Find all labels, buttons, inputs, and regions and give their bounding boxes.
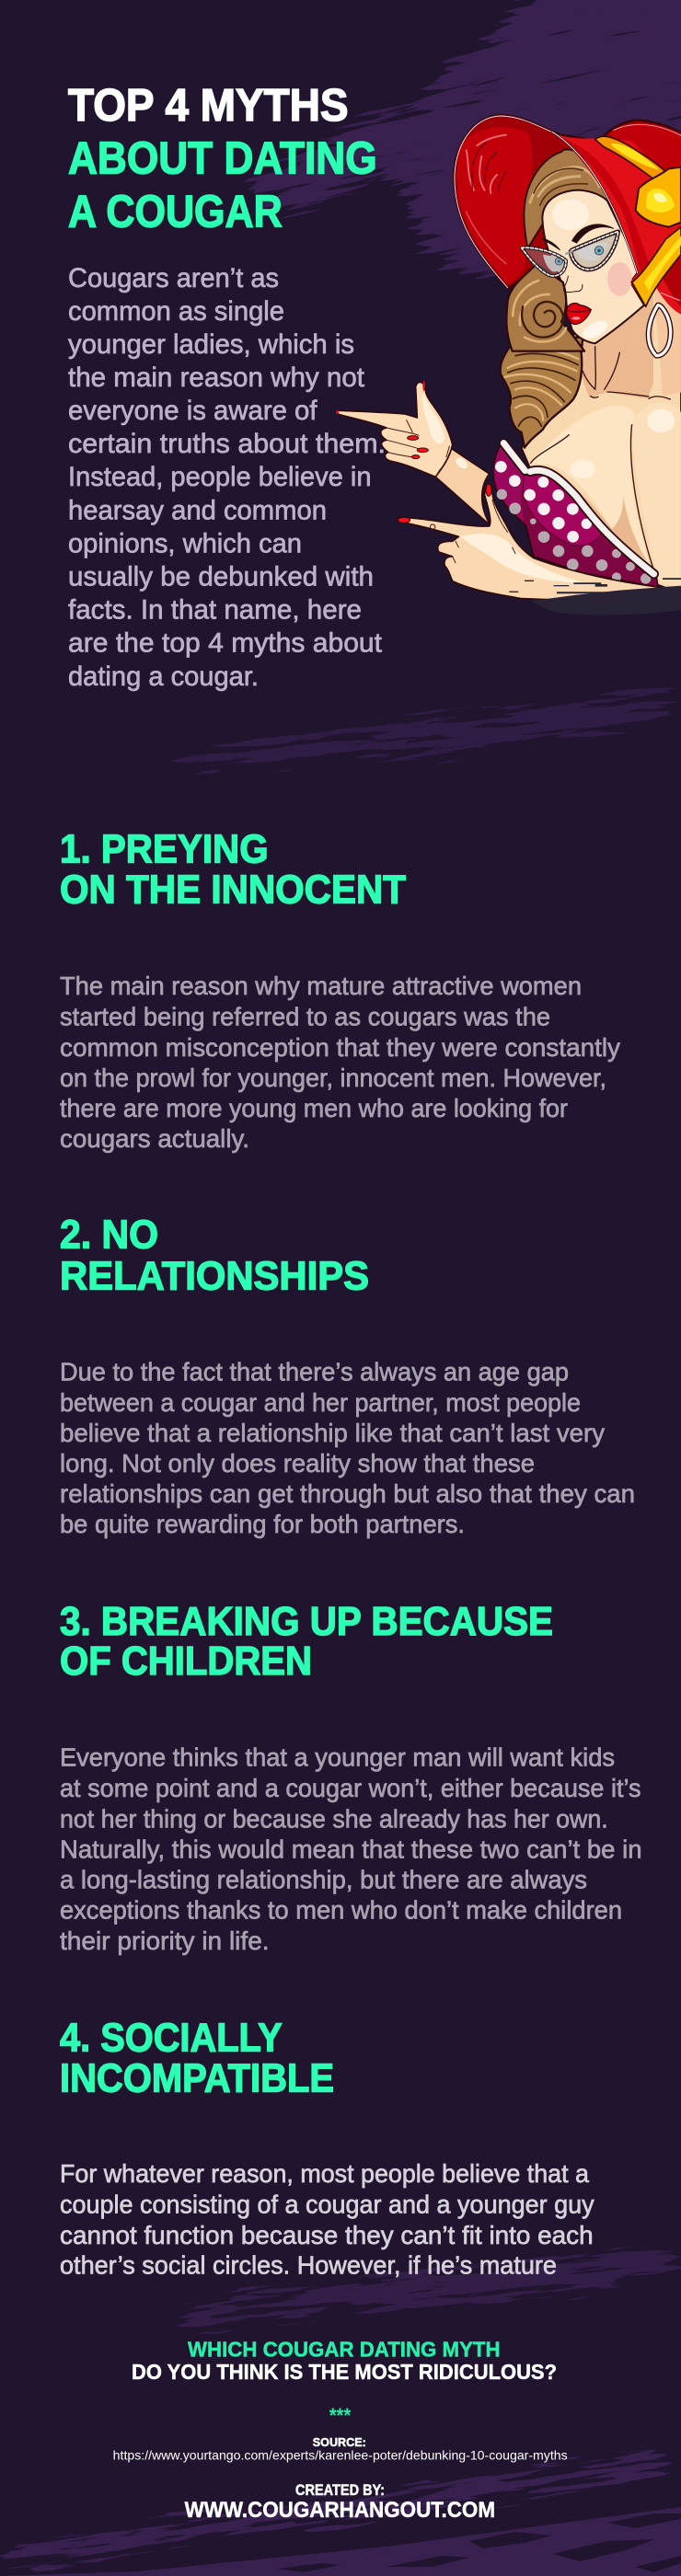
heading: myth 1 (60, 826, 406, 913)
credit: WWW.COUGARHANGOUT.COM (185, 2498, 495, 2523)
credit: CREATED BY: (295, 2482, 385, 2499)
closing question (132, 2338, 557, 2384)
text: myth 2 (60, 1358, 635, 1538)
text: myth 2: between a cougar and her partner, most people (60, 1388, 581, 1417)
text: myth 4: For whatever reason, most people believe that a (60, 2159, 589, 2188)
heading: myth 3: 3. BREAKING UP BECAUSE (60, 1599, 553, 1644)
closing question: DO YOU THINK IS THE MOST RIDICULOUS? (132, 2360, 557, 2384)
intro paragraph: the main reason why not (68, 362, 365, 393)
source: SOURCE: (313, 2436, 366, 2449)
text: myth 2: Due to the fact that there’s always an age gap (60, 1358, 569, 1386)
text: myth 3: a long-lasting relationship, but there are always (60, 1866, 587, 1894)
nose and lips (564, 276, 591, 324)
text: myth 3: Naturally, this would mean that these two can’t be in (60, 1835, 642, 1864)
intro paragraph: everyone is aware of (68, 396, 317, 426)
text: myth 2: believe that a relationship like that can’t last very (60, 1419, 605, 1447)
heading: myth 4: INCOMPATIBLE (60, 2055, 334, 2101)
illustration: pin-up woman pointing (336, 115, 681, 615)
text: myth 1: there are more young men who are looking for (60, 1094, 568, 1122)
text: myth 3 (60, 1743, 642, 1955)
hair: lower waves (501, 338, 583, 448)
title (68, 81, 377, 236)
text: myth 3: Everyone thinks that a younger man will want kids (60, 1743, 615, 1772)
heading: myth 1: ON THE INNOCENT (60, 868, 406, 913)
text: myth 1: on the prowl for younger, innocent men. However, (60, 1064, 606, 1092)
intro paragraph: certain truths about them. (68, 429, 386, 459)
source (113, 2436, 568, 2463)
text: myth 3: exceptions thanks to men who don’t make children (60, 1896, 622, 1925)
upper arm and pointing hand (336, 381, 491, 526)
hair curl (506, 264, 584, 351)
title: ABOUT DATING (68, 134, 377, 184)
intro paragraph: opinions, which can (68, 528, 302, 559)
intro paragraph: usually be debunked with (68, 561, 374, 592)
earring (649, 305, 671, 356)
intro paragraph: dating a cougar. (68, 661, 259, 692)
heading: myth 3: OF CHILDREN (60, 1639, 312, 1684)
heading: myth 2 (60, 1213, 369, 1298)
polka dot bra (493, 443, 658, 587)
closing question: WHICH COUGAR DATING MYTH (188, 2338, 501, 2362)
text: myth 1: common misconception that they were constantly (60, 1033, 620, 1062)
hair: top and back (524, 149, 610, 248)
text: myth 3: their priority in life. (60, 1926, 270, 1955)
text: myth 4: other’s social circles. However, if he’s mature (60, 2251, 557, 2280)
intro paragraph: hearsay and common (68, 495, 327, 526)
text: myth 2: be quite rewarding for both partners. (60, 1510, 465, 1538)
text: myth 3: not her thing or because she already has her own. (60, 1805, 608, 1834)
text: myth 4: cannot function because they can’t fit into each (60, 2221, 594, 2249)
source: https://www.yourtango.com/experts/karenlee-poter/debunking-10-cougar-myths (113, 2448, 568, 2463)
heading: myth 2: 2. NO (60, 1213, 158, 1258)
heading: myth 1: 1. PREYING (60, 826, 269, 872)
intro paragraph: Instead, people believe in (68, 462, 372, 492)
heading: myth 4: 4. SOCIALLY (60, 2015, 283, 2061)
text: myth 4 (60, 2159, 594, 2280)
hat crown (552, 132, 681, 315)
intro paragraph: facts. In that name, here (68, 594, 362, 626)
text: myth 4: couple consisting of a cougar and a younger guy (60, 2190, 594, 2219)
text: myth 1: The main reason why mature attractive women (60, 972, 582, 1000)
background: bottom brush stroke (0, 2448, 681, 2576)
background: lower brush streak (166, 2186, 681, 2380)
face (506, 190, 644, 351)
intro paragraph: common as single (68, 296, 284, 327)
torso and neck (522, 282, 681, 593)
title: TOP 4 MYTHS (68, 81, 348, 131)
separator asterisks: *** (329, 2404, 352, 2427)
intro paragraph: are the top 4 myths about (68, 627, 383, 659)
glasses and eyes (522, 224, 618, 276)
title: A COUGAR (68, 187, 283, 236)
text: myth 3: at some point and a cougar won’t, either because it’s (60, 1774, 641, 1802)
intro paragraph: younger ladies, which is (68, 329, 354, 360)
heading: myth 2: RELATIONSHIPS (60, 1253, 369, 1298)
background: top brush stroke (185, 0, 681, 399)
intro paragraph (68, 263, 386, 692)
hat brim back lobes (454, 115, 681, 288)
text: myth 1: started being referred to as cougars was the (60, 1002, 550, 1030)
text: myth 1 (60, 972, 620, 1153)
heading: myth 3 (60, 1599, 553, 1684)
text: myth 2: long. Not only does reality show that these (60, 1449, 535, 1478)
heading: myth 4 (60, 2015, 334, 2101)
intro paragraph: Cougars aren’t as (68, 263, 279, 293)
background: middle brush streak (166, 633, 681, 825)
lower hand and forearm (398, 484, 681, 615)
text: myth 2: relationships can get through but also that they can (60, 1479, 635, 1508)
credit (185, 2482, 495, 2523)
grunge dark edge under arm (531, 586, 681, 615)
text: myth 1: cougars actually. (60, 1124, 249, 1153)
yellow ribbon and bow (595, 136, 681, 306)
